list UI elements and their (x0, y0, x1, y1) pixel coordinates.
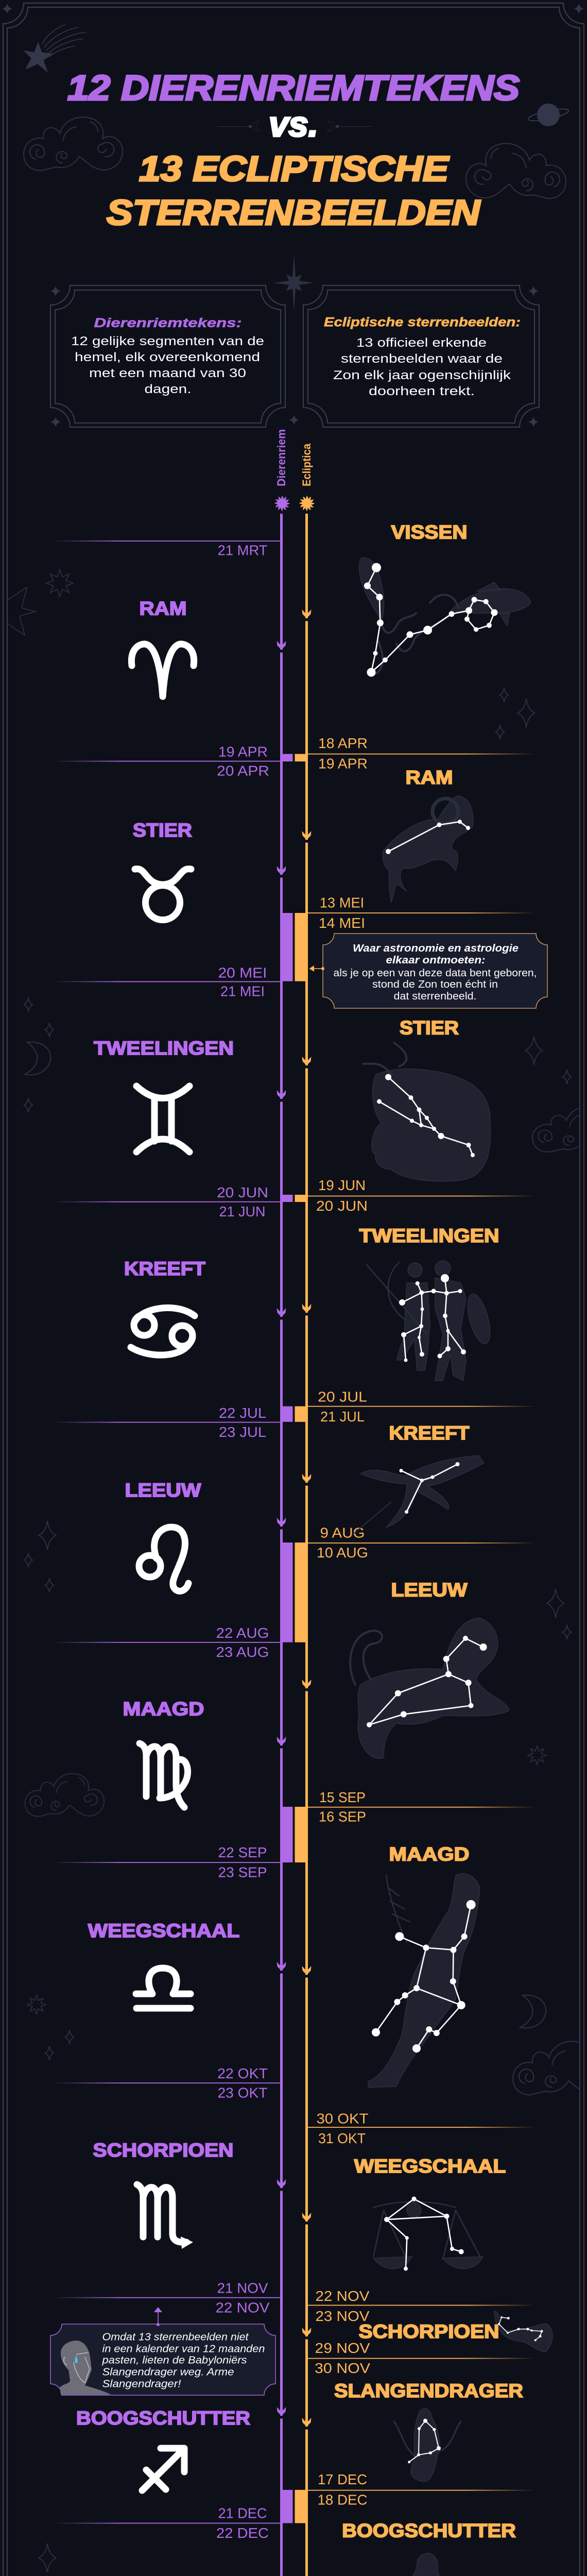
callout: Slangendrager weggelaten (50, 2307, 275, 2395)
constellation date markers: 9 AUG (320, 1524, 365, 1540)
title: 13 ECLIPTISCHE (139, 149, 450, 189)
zodiac sign: Ram: RAM (139, 598, 186, 619)
constellation heading: Kreeft: KREEFT (389, 1422, 470, 1444)
constellation: Slangendrager (394, 2409, 461, 2482)
constellation date markers: 16 SEP (319, 1809, 366, 1825)
zodiac date markers: 21 MEI (220, 983, 265, 999)
zodiac date markers: 21 NOV (217, 2280, 268, 2296)
panel: Ecliptische sterrenbeelden definition: doorheen trekt. (369, 384, 475, 398)
zodiac sign: Ram (131, 598, 194, 697)
panel: Ecliptische sterrenbeelden definition: Zon elk jaar ogenschijnlijk (333, 368, 511, 382)
constellation: Vissen (top) (359, 557, 531, 677)
constellation heading: Weegschaal: WEEGSCHAAL (354, 2156, 506, 2177)
zodiac date markers: 22 AUG (216, 1625, 269, 1641)
constellation date markers: 18 DEC (317, 2492, 368, 2508)
zodiac sign: Tweelingen: TWEELINGEN (94, 1038, 234, 1059)
constellation date markers: 29 NOV (315, 2340, 370, 2356)
constellation date markers: 17 DEC (318, 2471, 367, 2487)
zodiac date markers: 22 SEP (218, 1844, 267, 1860)
zodiac sign: Boogschutter (76, 2408, 250, 2490)
zodiac date markers: 23 AUG (216, 1644, 269, 1660)
zodiac sign: Kreeft: KREEFT (124, 1258, 205, 1279)
zodiac date markers: 20 JUN (217, 1184, 268, 1200)
constellation heading: Tweelingen: TWEELINGEN (359, 1225, 499, 1246)
overlap bars: periods where zodiac and constellation coincide (281, 754, 307, 2576)
constellation date markers: 30 NOV (315, 2360, 370, 2376)
timeline: zodiac axis (277, 514, 286, 2576)
constellation: Weegschaal (373, 2197, 483, 2271)
panel: Ecliptische sterrenbeelden definition (303, 285, 539, 427)
panel: Ecliptische sterrenbeelden definition: sterrenbeelden waar de (341, 352, 503, 366)
constellation heading: Schorpioen: SCHORPIOEN (358, 2321, 499, 2342)
constellation heading: Vissen: VISSEN (391, 521, 468, 543)
panel: Dierenriemtekens definition (50, 285, 299, 427)
constellation date markers: 30 OKT (316, 2110, 369, 2126)
zodiac date markers: 19 APR (218, 743, 268, 759)
constellation: Kreeft (352, 1455, 484, 1535)
icon: purple sun top (274, 496, 290, 511)
callout: Slangendrager weggelaten: in een kalender van 12 maanden (102, 2344, 265, 2355)
zodiac date markers: 20 MEI (218, 965, 267, 981)
constellation date markers: 21 JUL (320, 1409, 365, 1425)
zodiac date markers: 23 OKT (217, 2085, 268, 2101)
constellation date markers: 22 NOV (315, 2288, 370, 2304)
constellation: Schorpioen (small) (494, 2311, 553, 2352)
zodiac sign: Leeuw (125, 1480, 201, 1591)
constellation: Boogschutter (340, 2553, 510, 2576)
zodiac date markers: 23 SEP (218, 1865, 267, 1880)
callout: Slangendrager weggelaten: pasten, lieten de Babyloniërs (101, 2355, 247, 2366)
constellation date markers: 19 JUN (318, 1177, 366, 1193)
constellation: Maagd (368, 1873, 480, 2088)
constellation date markers: 13 MEI (320, 894, 364, 911)
panel: Dierenriemtekens definition: Dierenriemtekens: (94, 316, 242, 330)
callout: astronomie en astrologie: elkaar ontmoeten: (386, 955, 485, 966)
constellation heading: Ram: RAM (406, 767, 453, 788)
icon: orange sun top (299, 496, 315, 511)
zodiac date markers: 22 DEC (216, 2525, 269, 2541)
constellation date markers: 15 SEP (319, 1789, 366, 1805)
icon: crying Ophiuchus bust (60, 2341, 111, 2395)
constellation: Leeuw (350, 1618, 509, 1758)
zodiac date markers: 20 APR (217, 762, 269, 779)
zodiac date markers: 21 DEC (218, 2505, 267, 2521)
icon: compass star (273, 255, 314, 311)
constellation: Tweelingen (367, 1261, 494, 1381)
timeline: ecliptic axis (302, 514, 311, 2576)
constellation date markers: 19 APR (318, 755, 368, 771)
callout: astronomie en astrologie (309, 934, 547, 1008)
zodiac sign: Stier: STIER (133, 820, 192, 841)
constellation date markers: 20 JUN (316, 1198, 368, 1214)
zodiac date markers: 22 JUL (219, 1405, 266, 1421)
constellation date markers (307, 735, 536, 2576)
constellation: Ram (383, 796, 473, 903)
callout: astronomie en astrologie: Waar astronomie en astrologie (353, 943, 519, 954)
title: 12 DIERENRIEMTEKENS (67, 68, 520, 108)
zodiac date markers (53, 540, 281, 2576)
panel: Ecliptische sterrenbeelden definition: 13 officieel erkende (356, 336, 487, 350)
constellation heading: Boogschutter: BOOGSCHUTTER (342, 2520, 516, 2541)
zodiac date markers: 21 MRT (217, 542, 268, 558)
constellation date markers: 10 AUG (317, 1545, 368, 1561)
zodiac sign: Boogschutter: BOOGSCHUTTER (76, 2408, 250, 2429)
zodiac sign: Schorpioen: SCHORPIOEN (93, 2140, 234, 2161)
callout: Slangendrager weggelaten: Slangendrager weg. Arme (102, 2367, 234, 2378)
zodiac date markers: 22 NOV (215, 2299, 270, 2315)
zodiac sign: Leeuw: LEEUW (125, 1480, 201, 1501)
zodiac sign: Maagd: MAAGD (123, 1698, 204, 1720)
panel: Dierenriemtekens definition: hemel, elk overeenkomend (75, 350, 260, 364)
zodiac sign: Kreeft (124, 1258, 205, 1355)
constellation heading: Leeuw: LEEUW (391, 1580, 468, 1601)
constellation heading: Slangendrager: SLANGENDRAGER (334, 2380, 523, 2401)
title: vs. (269, 104, 318, 144)
zodiac sign: Weegschaal (88, 1920, 239, 2008)
title (67, 68, 520, 232)
panel: Ecliptische sterrenbeelden definition: Ecliptische sterrenbeelden: (324, 315, 521, 330)
zodiac sign: Schorpioen (93, 2140, 234, 2249)
zodiac date markers: 22 OKT (217, 2065, 268, 2081)
panel: Dierenriemtekens definition: dagen. (144, 382, 192, 396)
axis label: Dierenriem: Dierenriem (275, 429, 288, 486)
panel: Dierenriemtekens definition: met een maand van 30 (89, 366, 246, 380)
zodiac sign: Stier (133, 820, 192, 920)
constellation date markers: 14 MEI (319, 915, 365, 931)
callout: astronomie en astrologie: stond de Zon toen écht in (372, 979, 498, 990)
zodiac date markers: 21 JUN (219, 1204, 266, 1219)
zodiac sign: Tweelingen (94, 1038, 234, 1152)
panel: Dierenriemtekens definition: 12 gelijke segmenten van de (71, 334, 264, 348)
zodiac sign: Maagd (123, 1698, 204, 1807)
constellation heading: Stier: STIER (400, 1018, 459, 1039)
constellation: Stier (363, 1043, 491, 1181)
axis label: Ecliptica: Ecliptica (300, 443, 313, 486)
constellation date markers: 31 OKT (318, 2130, 366, 2146)
callout: astronomie en astrologie: als je op een van deze data bent geboren, (334, 968, 537, 979)
title: STERRENBEELDEN (107, 193, 481, 232)
callout: Slangendrager weggelaten: Omdat 13 sterrenbeelden niet (102, 2332, 249, 2343)
zodiac sign: Weegschaal: WEEGSCHAAL (88, 1920, 239, 1941)
constellation date markers: 18 APR (318, 735, 368, 751)
constellation heading: Maagd: MAAGD (389, 1843, 470, 1865)
constellation date markers: 23 NOV (315, 2308, 370, 2324)
callout: Slangendrager weggelaten: Slangendrager! (102, 2378, 181, 2389)
constellation date markers: 20 JUL (318, 1389, 367, 1404)
zodiac date markers: 23 JUL (219, 1424, 266, 1440)
callout: astronomie en astrologie: dat sterrenbeeld. (393, 991, 477, 1002)
